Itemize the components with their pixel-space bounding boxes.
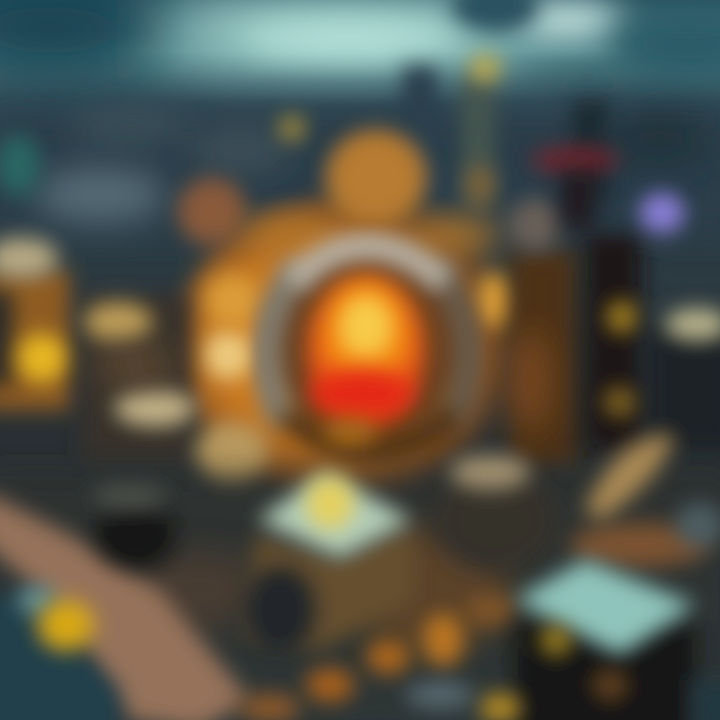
teal-roofed building, lower right xyxy=(515,560,695,720)
right round dark building xyxy=(433,455,557,572)
shell right side xyxy=(435,265,469,425)
orange core xyxy=(308,274,424,426)
purple light xyxy=(640,193,684,233)
dark lower city ground xyxy=(0,470,720,720)
yellow orb lower left xyxy=(38,600,94,650)
orange street on lower left xyxy=(0,490,250,720)
shell left side xyxy=(266,265,300,425)
right black tower with yellow windows xyxy=(585,235,641,450)
distant skyline xyxy=(0,65,720,235)
bright core centre xyxy=(342,297,390,353)
box pale top xyxy=(258,472,412,558)
golden slanted roof right xyxy=(585,435,675,520)
box body xyxy=(245,530,415,650)
far right small grey block xyxy=(676,503,720,547)
central sphere xyxy=(266,245,469,450)
right brown tower xyxy=(509,199,576,465)
shell top highlight xyxy=(292,246,445,282)
ember under core xyxy=(324,418,376,446)
orange street lights at bottom xyxy=(240,523,710,720)
golden dome xyxy=(326,130,426,226)
bottom left teal corner xyxy=(0,586,120,720)
distant yellow lights xyxy=(279,54,501,205)
red roof xyxy=(531,147,619,173)
sphere lower shadow xyxy=(285,415,455,450)
glow lights beside sphere xyxy=(204,219,513,379)
dark round building, lower left xyxy=(92,483,175,569)
tower below red roof xyxy=(560,170,596,230)
left orange tower xyxy=(0,238,70,410)
left mid buildings with lit roofs xyxy=(82,295,268,482)
sphere interior xyxy=(268,245,468,445)
bottom street blocks xyxy=(406,680,720,720)
central box building xyxy=(244,472,415,654)
orange explosion glow behind sphere xyxy=(175,195,535,495)
box yellow light xyxy=(306,477,354,529)
box dark left side xyxy=(244,566,316,654)
stormy sky clouds xyxy=(0,0,720,81)
red core base xyxy=(310,367,414,419)
small bronze dome xyxy=(178,178,246,246)
far right dark building xyxy=(648,308,720,450)
